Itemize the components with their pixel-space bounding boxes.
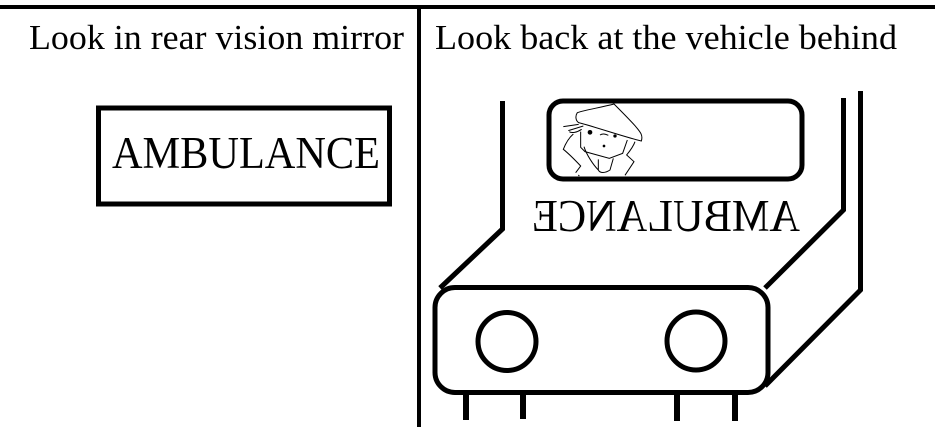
sign: ambulance in mirror <box>98 108 390 204</box>
driver sketch <box>563 104 642 176</box>
panel: left heading: Look in rear vision mirror <box>29 18 404 57</box>
wheels <box>466 393 735 421</box>
hood <box>435 288 768 392</box>
driver eyes and nose <box>588 130 617 147</box>
cab side edge <box>765 91 860 386</box>
cab outline <box>440 98 844 288</box>
mirrored ambulance text: AMBULANCE <box>532 191 800 241</box>
top border <box>0 5 935 9</box>
right headlight <box>667 312 725 370</box>
panel: right heading: Look back at the vehicle behind <box>435 18 898 57</box>
left headlight <box>478 312 536 370</box>
panel divider <box>417 7 421 427</box>
sign: ambulance in mirror: AMBULANCE <box>112 128 380 178</box>
ambulance vehicle <box>435 91 860 421</box>
windshield <box>549 101 802 179</box>
